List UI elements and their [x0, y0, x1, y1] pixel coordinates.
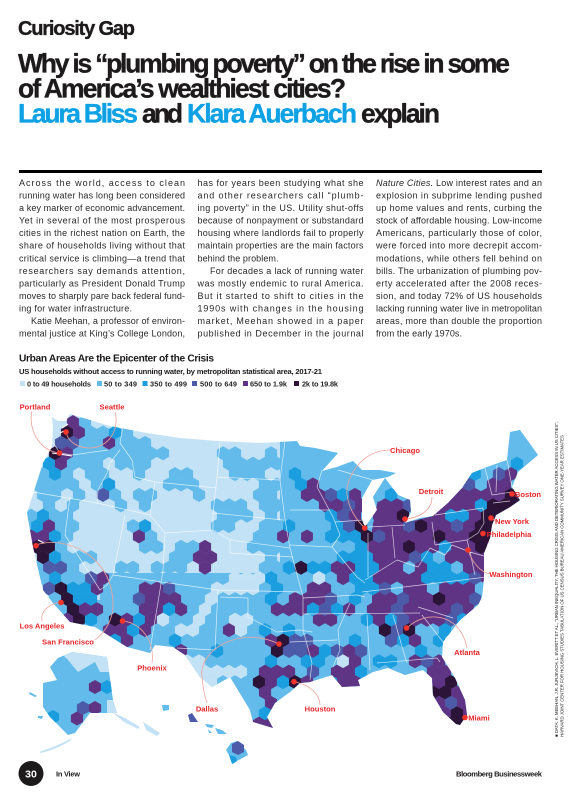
article column 1 — [19, 178, 186, 339]
article column 2: 1990s with changes in the housing — [198, 304, 364, 314]
article column 1: ing for water infrastructure. — [19, 304, 132, 314]
article column 1: Katie Meehan, a professor of environ- — [31, 316, 185, 326]
legend: 350 to 499 — [150, 380, 187, 388]
article column 3: up home values and rents, curbing the — [376, 203, 542, 213]
article column 3: areas, more than double the proportion — [376, 316, 542, 326]
headline: and — [142, 99, 183, 129]
article column 2: behind the problem. — [198, 253, 278, 263]
Hawaii — [162, 705, 248, 764]
article column 1: a key marker of economic advancement. — [19, 203, 185, 213]
article column 3: lacking running water live in metropolitan — [376, 304, 542, 314]
article column 1: particularly as President Donald Trump — [19, 278, 185, 288]
legend: 500 to 649 — [200, 380, 237, 388]
page number badge — [18, 761, 44, 786]
source note, rotated: ■ DATA: K. MEEHAN, J.R. JURJEVICH, L. EVERITT ET AL., “URBAN INEQUALITY, THE HOUSING CRISIS AND DETERIORATING WATER ACCESS IN US CITIES”; — [554, 422, 559, 737]
article column 3: sion, and today 72% of US households — [376, 291, 542, 301]
city labels: San Francisco — [42, 638, 94, 646]
article column 2: housing where landlords fail to properly — [198, 228, 364, 238]
headline: of America’s wealthiest cities? — [18, 74, 346, 104]
article column 1: researchers say demands attention, — [19, 266, 185, 276]
article column 2: and other researchers call “plumb- — [198, 190, 364, 200]
article column 1: Across the world, access to clean — [19, 178, 185, 188]
article column 3: explosion in subprime lending pushed — [376, 190, 542, 200]
city labels: Los Angeles — [20, 622, 64, 630]
section heading: Curiosity Gap: Curiosity Gap — [18, 18, 135, 40]
legend: 650 to 1.9k — [250, 380, 288, 388]
article column 3 — [375, 178, 542, 339]
leader lines to cities — [31, 411, 497, 705]
article column 2: was mostly endemic to rural America. — [196, 278, 364, 288]
city labels: Philadelphia — [487, 530, 532, 539]
headline — [18, 49, 510, 129]
page number badge: 30 — [25, 768, 37, 780]
article column 1: running water has long been considered — [19, 190, 185, 200]
legend: 0 to 49 households — [27, 380, 91, 388]
article column 2: has for years been studying what she — [198, 178, 364, 188]
article column 2: ing poverty” in the US. Utility shut-offs — [198, 203, 364, 213]
article column 3: Nature Cities. Low interest rates and an — [376, 178, 542, 188]
article column 3: erty accelerated after the 2008 reces- — [376, 278, 542, 288]
article column 1: critical service is climbing—a trend that — [19, 253, 185, 263]
city labels — [20, 402, 541, 722]
article column 3: bills. The urbanization of plumbing pov- — [376, 266, 542, 276]
city labels: Portland — [20, 402, 51, 412]
city labels: Detroit — [419, 487, 444, 496]
city dots — [33, 429, 515, 720]
chart subtitle: US households without access to running water, by metropolitan statistical area, 2017-21 — [19, 367, 323, 376]
top rule — [19, 170, 542, 173]
Alaska — [29, 650, 160, 753]
headline: Laura Bliss — [18, 99, 138, 129]
article column 1: cities in the richest nation on Earth, the — [19, 228, 185, 238]
city labels: Seattle — [100, 402, 124, 412]
article column 1: moves to sharply pare back federal fund- — [19, 291, 185, 301]
legend: 50 to 349 — [104, 380, 137, 388]
city labels: Atlanta — [454, 648, 481, 657]
article column 2: For decades a lack of running water — [210, 266, 364, 276]
article column 1: share of households living without that — [19, 241, 185, 251]
legend — [20, 380, 339, 388]
city labels: Miami — [468, 714, 490, 722]
article column 2: because of nonpayment or substandard — [198, 216, 364, 226]
article column 3: stock of affordable housing. Low-income — [376, 216, 542, 226]
city labels: Dallas — [196, 704, 218, 714]
source note, rotated: HARVARD JOINT CENTER FOR HOUSING STUDIES TABULATION OF US CENSUS BUREAU AMERICAN COMMUNITY SURVEY ONE-YEAR ESTIMATES — [560, 435, 564, 737]
city labels: Boston — [515, 490, 541, 499]
legend: 2k to 19.8k — [302, 380, 339, 388]
article column 3: were forced into more decrepit accom- — [375, 241, 542, 251]
article column 3: Americans, particularly those of color, — [376, 228, 542, 238]
article column 1: Yet in several of the most prosperous — [19, 216, 186, 226]
chart title: Urban Areas Are the Epicenter of the Crisis — [19, 354, 214, 364]
article column 2: But it started to shift to cities in the — [198, 291, 364, 301]
headline: Klara Auerbach — [187, 99, 357, 129]
hexagon map of contiguous US — [19, 410, 545, 740]
section footer: In View: In View — [56, 770, 80, 778]
headline: explain — [361, 99, 440, 129]
article column 2 — [196, 178, 364, 339]
Puget Sound and coastal cutouts — [38, 424, 72, 543]
article column 2: published in December in the journal — [198, 329, 364, 339]
source note, rotated — [554, 422, 564, 737]
article column 2: market, Meehan showed in a paper — [198, 316, 364, 326]
article column 3: from the early 1970s. — [376, 329, 462, 339]
city labels: Houston — [305, 704, 336, 714]
city labels: Chicago — [390, 446, 420, 455]
city labels: Phoenix — [137, 664, 168, 672]
article column 1: mental justice at King’s College London, — [19, 329, 185, 339]
city labels: Washington — [489, 570, 533, 579]
article column 3: modations, while others fell behind on — [376, 253, 542, 263]
city labels: New York — [495, 517, 530, 526]
headline: Why is “plumbing poverty” on the rise in some — [18, 49, 510, 79]
article column 2: maintain properties are the main factors — [198, 241, 364, 251]
publication footer: Bloomberg Businessweek: Bloomberg Businessweek — [456, 770, 543, 778]
